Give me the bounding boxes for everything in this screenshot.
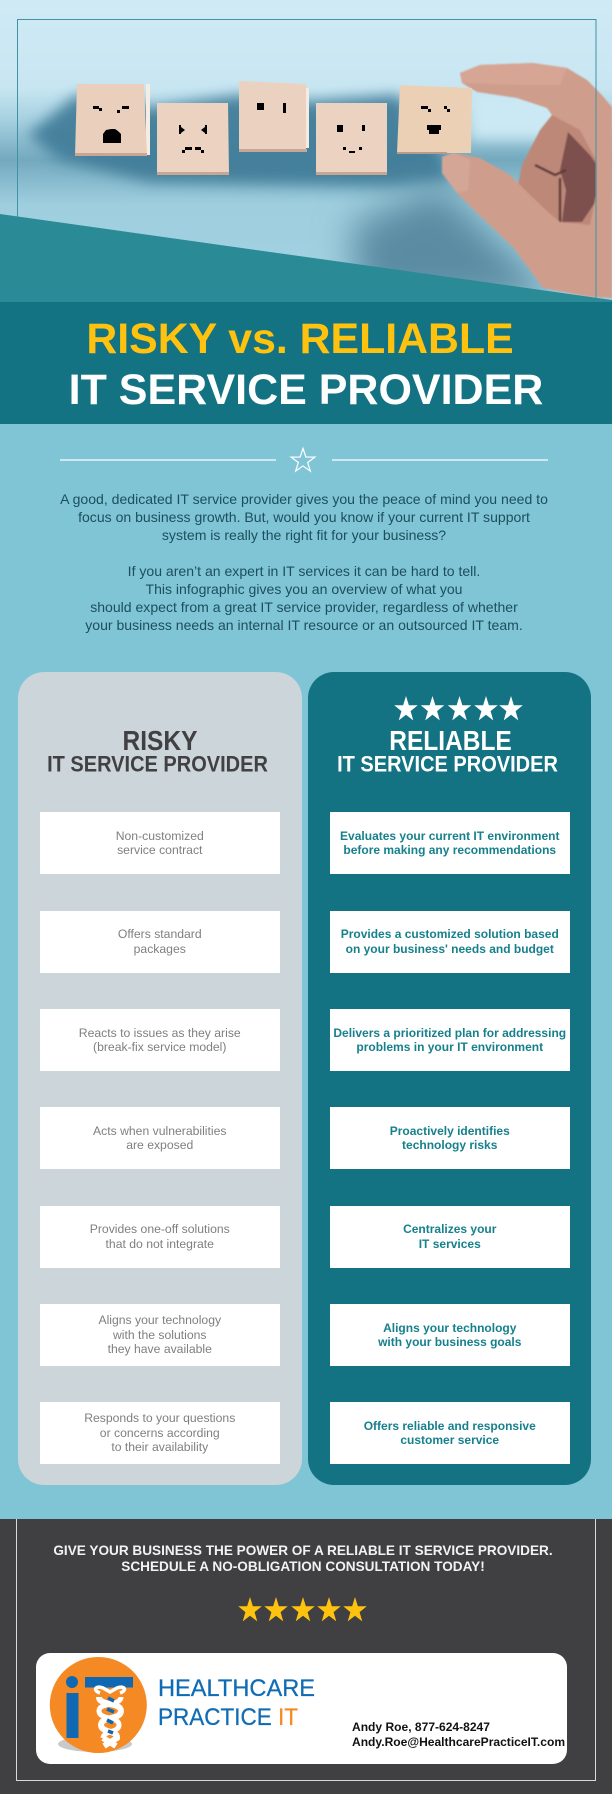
reliable item 5: IT services [419, 1236, 481, 1250]
five gold stars [238, 1597, 367, 1622]
call to action: GIVE YOUR BUSINESS THE POWER OF A RELIABLE IT SERVICE PROVIDER. [53, 1543, 553, 1558]
title line: it service provider: IT SERVICE PROVIDER [69, 366, 543, 414]
risky item 3: Reacts to issues as they arise [79, 1026, 241, 1040]
risky item 1 [40, 812, 280, 874]
heading: reliable: IT SERVICE PROVIDER [337, 753, 558, 777]
risky item 7 [40, 1402, 280, 1464]
heading: reliable [337, 726, 558, 777]
five white stars [394, 696, 523, 720]
intro text [60, 491, 548, 633]
risky item 5: Provides one-off solutions [90, 1222, 230, 1236]
wooden block faces [75, 81, 472, 175]
reliable item 2: Provides a customized solution based [341, 927, 559, 941]
heading: risky [47, 726, 268, 777]
hero photo: wooden face blocks held by a hand [0, 0, 612, 302]
reliable item 6: Aligns your technology [383, 1320, 516, 1334]
title band [0, 302, 612, 424]
heading: risky: IT SERVICE PROVIDER [47, 753, 268, 777]
risky item 6 [40, 1304, 280, 1366]
risky item 5: that do not integrate [106, 1236, 214, 1250]
footer band [0, 1519, 612, 1794]
risky item 7: to their availability [111, 1440, 208, 1454]
risky item 6: with the solutions [113, 1328, 206, 1342]
frame line [18, 20, 596, 298]
risky item 4: are exposed [126, 1138, 193, 1152]
risky item 2 [40, 910, 280, 972]
contact details [352, 1720, 565, 1749]
white contact card [36, 1653, 567, 1764]
title line: risky vs reliable: RISKY vs. RELIABLE [86, 315, 514, 363]
divider with outline star [60, 446, 548, 472]
risky item 1: service contract [117, 843, 202, 857]
call to action [53, 1543, 553, 1574]
risky item 4 [40, 1107, 280, 1169]
intro text: This infographic gives you an overview of what you [145, 581, 462, 597]
reliable item 2 [330, 910, 570, 972]
call to action: SCHEDULE A NO-OBLIGATION CONSULTATION TODAY! [121, 1559, 485, 1574]
reliable item 1: before making any recommendations [343, 843, 556, 857]
logo: healthcare practice it: HEALTHCARE [158, 1676, 315, 1702]
reliable item 2: on your business' needs and budget [346, 942, 554, 956]
reliable item 4 [330, 1107, 570, 1169]
reliable item 4: technology risks [402, 1138, 497, 1152]
reliable item 3: problems in your IT environment [356, 1040, 543, 1054]
risky item 7: Responds to your questions [84, 1411, 235, 1425]
logo: healthcare practice it: PRACTICE IT [158, 1705, 298, 1731]
risky item 2: Offers standard [118, 927, 202, 941]
risky item 5 [40, 1206, 280, 1268]
reliable item 7: customer service [400, 1433, 499, 1447]
risky item 7: or concerns according [100, 1426, 220, 1440]
reliable item 1: Evaluates your current IT environment [340, 828, 559, 842]
intro text: your business needs an internal IT resource or an outsourced IT team. [85, 617, 523, 633]
risky item 3: (break-fix service model) [93, 1040, 226, 1054]
footer frame [16, 1519, 596, 1781]
intro text: A good, dedicated IT service provider gives you the peace of mind you need to [60, 491, 548, 507]
heading: reliable: RELIABLE [389, 726, 512, 757]
reliable item 5: Centralizes your [403, 1222, 496, 1236]
reliable item 1 [330, 812, 570, 874]
reliable item 7: Offers reliable and responsive [364, 1418, 536, 1432]
risky item 6: they have available [108, 1342, 212, 1356]
intro text: If you aren’t an expert in IT services it can be hard to tell. [128, 563, 480, 579]
reliable item 6: with your business goals [378, 1335, 521, 1349]
teal wedge [0, 214, 612, 302]
contact details: Andy.Roe@HealthcarePracticeIT.com [352, 1735, 565, 1749]
intro text: focus on business growth. But, would you know if your current IT support [78, 509, 530, 525]
risky item 6: Aligns your technology [98, 1313, 221, 1327]
risky item 3 [40, 1009, 280, 1071]
risky item 2: packages [134, 942, 186, 956]
reliable item 3: Delivers a prioritized plan for addressing [333, 1026, 566, 1040]
reliable item 4: Proactively identifies [390, 1124, 510, 1138]
intro text: system is really the right fit for your business? [162, 527, 446, 543]
logo: healthcare practice it [50, 1657, 315, 1753]
risky item 4: Acts when vulnerabilities [93, 1124, 226, 1138]
hand [442, 63, 612, 298]
panel: risky provider [18, 672, 302, 1485]
heading: risky: RISKY [123, 726, 197, 757]
reliable item 7 [330, 1402, 570, 1464]
risky item 1: Non-customized [116, 828, 204, 842]
reliable item 6 [330, 1304, 570, 1366]
reliable item 3 [330, 1009, 570, 1071]
intro text: should expect from a great IT service provider, regardless of whether [90, 599, 518, 615]
contact details: Andy Roe, 877-624-8247 [352, 1720, 490, 1734]
panel: reliable provider [308, 672, 591, 1485]
reliable item 5 [330, 1206, 570, 1268]
